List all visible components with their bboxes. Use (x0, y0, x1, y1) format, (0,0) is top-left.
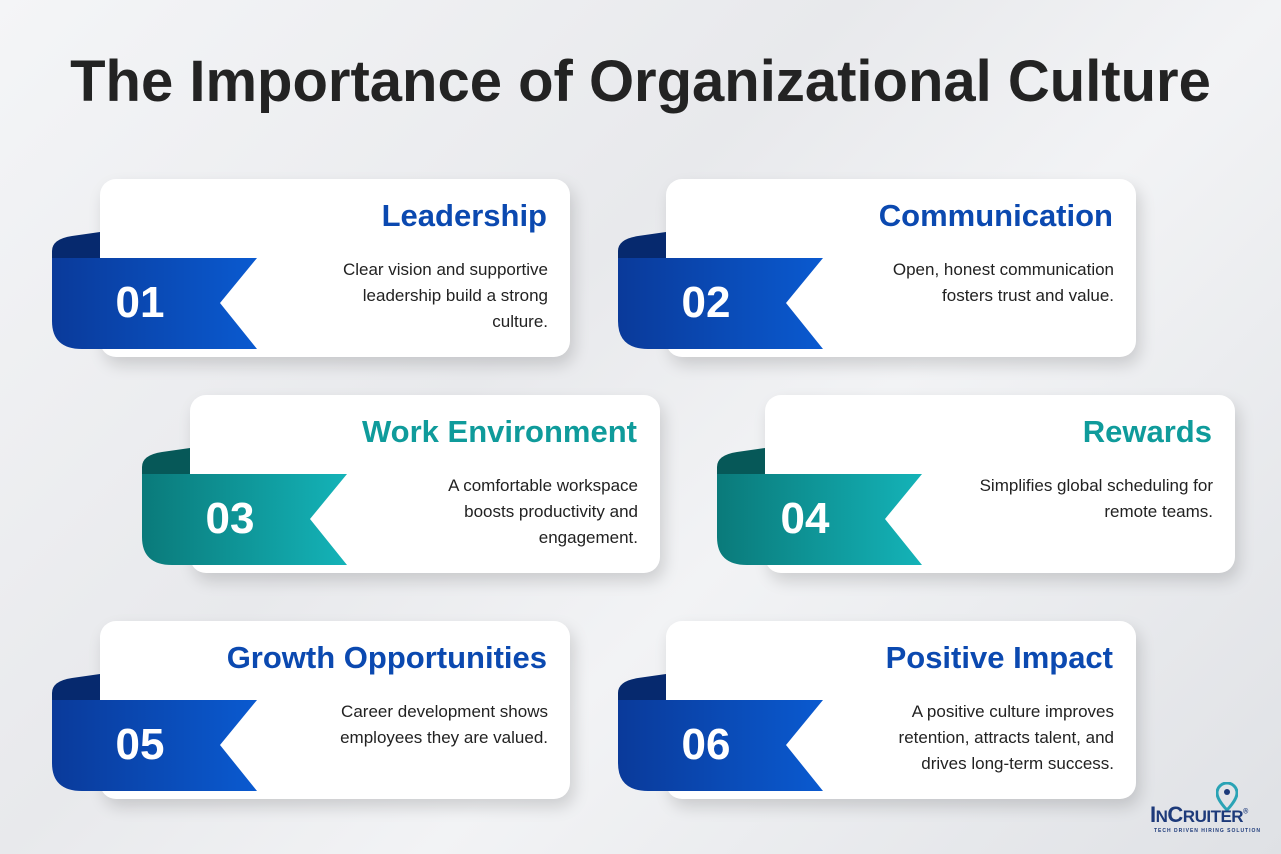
ribbon 04 (717, 448, 922, 565)
number 02: 02 (682, 278, 730, 327)
text: Career development shows employees they are valued. (340, 702, 548, 747)
heading: Rewards (1083, 414, 1212, 449)
ribbon 01 (52, 232, 257, 349)
heading: Growth Opportunities (227, 640, 547, 675)
ribbon 03 (142, 448, 347, 565)
logo: TECH DRIVEN HIRING SOLUTION (1154, 828, 1261, 834)
panel: rewards (717, 395, 1245, 587)
title: The Importance of Organizational Culture (70, 49, 1211, 114)
heading: Leadership (382, 198, 547, 233)
panel: leadership (52, 179, 580, 371)
panel: growth opportunities (52, 621, 580, 813)
text: Simplifies global scheduling for remote teams. (980, 476, 1213, 521)
heading: Work Environment (362, 414, 637, 449)
number 03: 03 (206, 494, 254, 543)
number 04: 04 (781, 494, 829, 543)
number 06: 06 (682, 720, 730, 769)
text: A comfortable workspace boosts productivity and engagement. (448, 476, 638, 547)
number 05: 05 (116, 720, 164, 769)
panel: work environment (142, 395, 670, 587)
number 01: 01 (116, 278, 164, 327)
heading: Communication (879, 198, 1113, 233)
logo (1150, 782, 1261, 834)
ribbon 02 (618, 232, 823, 349)
text: Clear vision and supportive leadership build a strong culture. (343, 260, 548, 331)
panel: communication (618, 179, 1146, 371)
ribbon 06 (618, 674, 823, 791)
icon: pin (1216, 782, 1238, 810)
text: Open, honest communication fosters trust and value. (893, 260, 1114, 305)
ribbon 05 (52, 674, 257, 791)
heading: Positive Impact (886, 640, 1113, 675)
logo: INCRUITER® (1150, 802, 1248, 827)
text: A positive culture improves retention, attracts talent, and drives long-term success. (899, 702, 1114, 773)
panel: positive impact (618, 621, 1146, 813)
